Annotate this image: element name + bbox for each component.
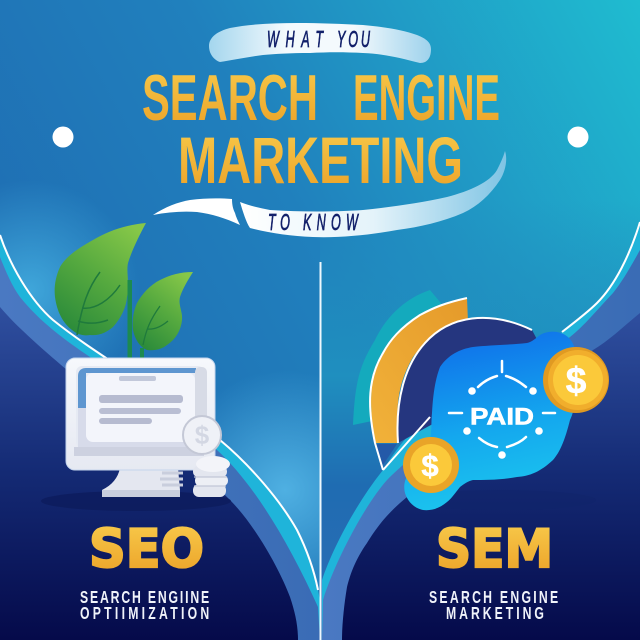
icon: large dollar coin: $ — [566, 360, 587, 401]
frame — [66, 358, 215, 470]
icon: paid blob — [404, 332, 576, 510]
decorative dot left — [52, 126, 74, 148]
target marks — [449, 361, 555, 447]
banner: what you: YOU — [337, 26, 370, 52]
blue wedge — [376, 444, 397, 465]
title: search engine marketing: ENGINE — [353, 61, 500, 134]
label: search engine optimization — [80, 588, 209, 624]
banner: to know: TO — [268, 209, 290, 235]
heading: SEM: SEM — [436, 519, 553, 580]
small leaf — [133, 272, 193, 350]
screen — [76, 366, 204, 448]
icon: plant leaves — [55, 223, 193, 374]
stems — [128, 280, 132, 374]
paid label: PAID — [470, 404, 534, 430]
banner: to know — [153, 151, 506, 237]
icon: silver coin stack: $ — [195, 420, 210, 450]
decorative dot right — [568, 126, 588, 148]
stand — [102, 468, 180, 490]
arc outlines — [370, 298, 532, 470]
shadow: right ground — [408, 490, 596, 510]
icon: silver coin stack — [183, 416, 230, 497]
icon: large dollar coin — [543, 347, 609, 413]
banner: what you: WHAT — [267, 26, 324, 52]
title: search engine marketing: SEARCH — [142, 61, 318, 134]
banner: to know: KNOW — [303, 209, 359, 235]
title: search engine marketing: MARKETING — [178, 123, 463, 197]
big leaf — [55, 223, 146, 335]
icon: gauge arcs — [353, 290, 540, 470]
icon: small dollar coin — [403, 437, 459, 493]
right curved panel — [322, 222, 640, 640]
gold arc — [371, 298, 468, 443]
banner: what you — [209, 23, 431, 63]
center divider — [320, 262, 322, 640]
label: search engine marketing: SEARCH ENGINE — [429, 588, 558, 608]
icon: small dollar coin: $ — [421, 448, 439, 483]
title: search engine marketing — [142, 61, 500, 197]
label: search engine optimization: SEARCH ENGIINE — [80, 588, 209, 608]
left curved panel — [0, 235, 320, 640]
heading: SEO: SEO — [89, 519, 204, 580]
label: search engine optimization: OPTIIMIZATION — [80, 604, 209, 624]
label: search engine marketing: MARKETING — [446, 604, 544, 624]
label: search engine marketing — [429, 588, 558, 624]
shadow: left ground — [41, 491, 231, 511]
navy arc — [397, 318, 540, 443]
window card — [86, 373, 195, 442]
icon: monitor — [66, 358, 215, 497]
teal arc — [353, 290, 445, 425]
